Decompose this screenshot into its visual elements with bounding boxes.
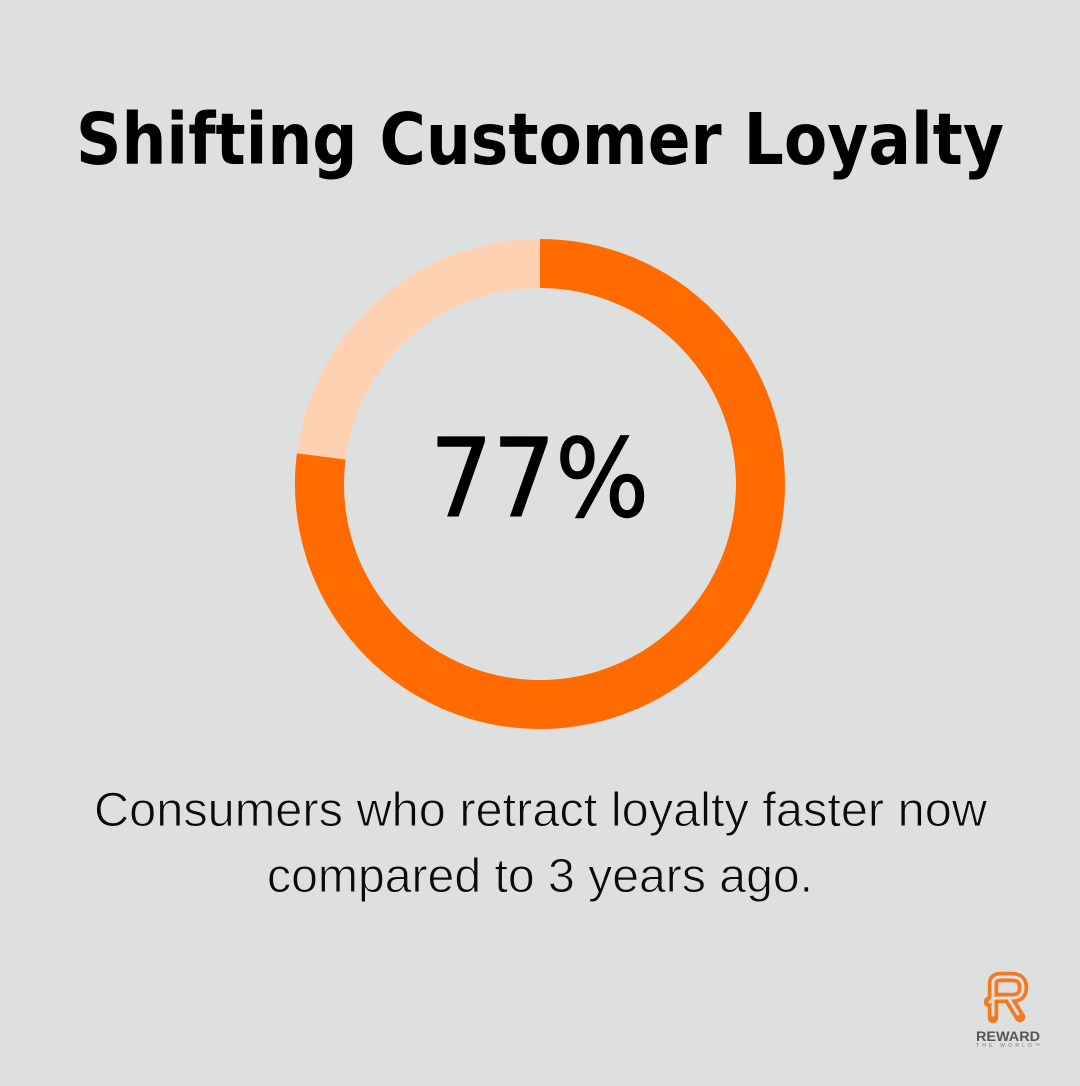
donut arc: 77 percent	[319, 264, 760, 704]
description text	[94, 784, 987, 903]
description line 1: Consumers who retract loyalty faster now	[94, 784, 987, 837]
donut chart: 77 percent	[319, 264, 760, 704]
logo: Reward the World	[976, 977, 1040, 1049]
logo wordmark: REWARD	[976, 1029, 1040, 1044]
center value: 77%	[430, 417, 649, 542]
logo tagline: THE WORLD™	[976, 1043, 1040, 1049]
description line 2: compared to 3 years ago.	[267, 850, 813, 903]
logo icon: R monogram	[989, 977, 1023, 1018]
donut track: remaining 23 percent	[320, 264, 760, 704]
